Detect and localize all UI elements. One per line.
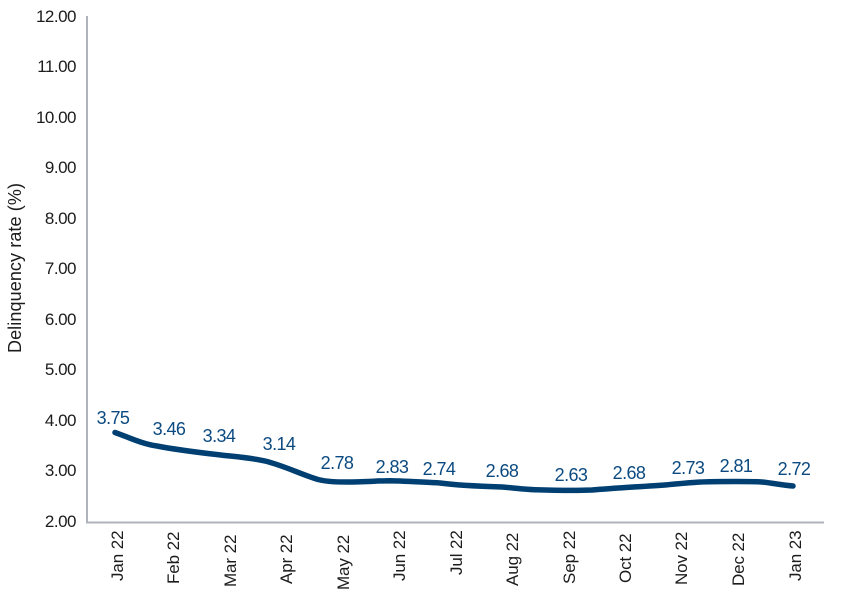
data value labels: 2.68 <box>486 461 519 481</box>
y axis tick labels: 11.00 <box>37 57 76 76</box>
data line <box>115 432 793 490</box>
x axis month labels: May 22 <box>334 535 353 590</box>
y axis tick labels: 2.00 <box>45 512 76 531</box>
data value labels: 3.75 <box>97 408 130 428</box>
x axis month labels: Apr 22 <box>277 534 296 584</box>
data value labels: 2.73 <box>672 458 705 478</box>
y axis tick labels: 7.00 <box>45 259 76 278</box>
data value labels: 3.34 <box>203 426 236 446</box>
y axis title: Delinquency rate (%) <box>5 183 25 353</box>
y axis tick labels: 9.00 <box>45 158 76 177</box>
x axis month labels: Jan 23 <box>786 531 805 581</box>
y axis tick labels: 3.00 <box>45 461 76 480</box>
axes <box>86 16 824 523</box>
y axis tick labels <box>36 7 76 531</box>
x axis month labels: Sep 22 <box>560 531 579 584</box>
x axis month labels: Jul 22 <box>447 530 466 575</box>
data value labels: 2.78 <box>321 453 354 473</box>
data value labels: 2.83 <box>376 457 409 477</box>
data value labels: 3.14 <box>263 434 296 454</box>
data value labels: 2.74 <box>423 459 456 479</box>
x axis month labels: Mar 22 <box>221 535 240 587</box>
x axis month labels: Feb 22 <box>164 532 183 584</box>
data value labels: 3.46 <box>153 419 186 439</box>
data value labels <box>97 408 811 485</box>
x axis month labels: Aug 22 <box>503 533 522 586</box>
x axis month labels: Jun 22 <box>390 531 409 581</box>
x axis month labels: Nov 22 <box>672 532 691 585</box>
x axis month labels: Oct 22 <box>616 534 635 583</box>
y axis tick labels: 4.00 <box>45 411 76 430</box>
x axis month labels <box>108 530 805 590</box>
y axis tick labels: 5.00 <box>45 360 76 379</box>
data value labels: 2.72 <box>778 459 811 479</box>
y axis tick labels: 12.00 <box>36 7 76 26</box>
data value labels: 2.81 <box>720 456 753 476</box>
x axis month labels: Dec 22 <box>729 533 748 586</box>
data value labels: 2.63 <box>555 465 588 485</box>
x axis month labels: Jan 22 <box>108 531 127 581</box>
y axis tick labels: 6.00 <box>45 310 76 329</box>
y axis tick labels: 8.00 <box>45 209 76 228</box>
y axis tick labels: 10.00 <box>36 108 76 127</box>
data value labels: 2.68 <box>613 463 646 483</box>
